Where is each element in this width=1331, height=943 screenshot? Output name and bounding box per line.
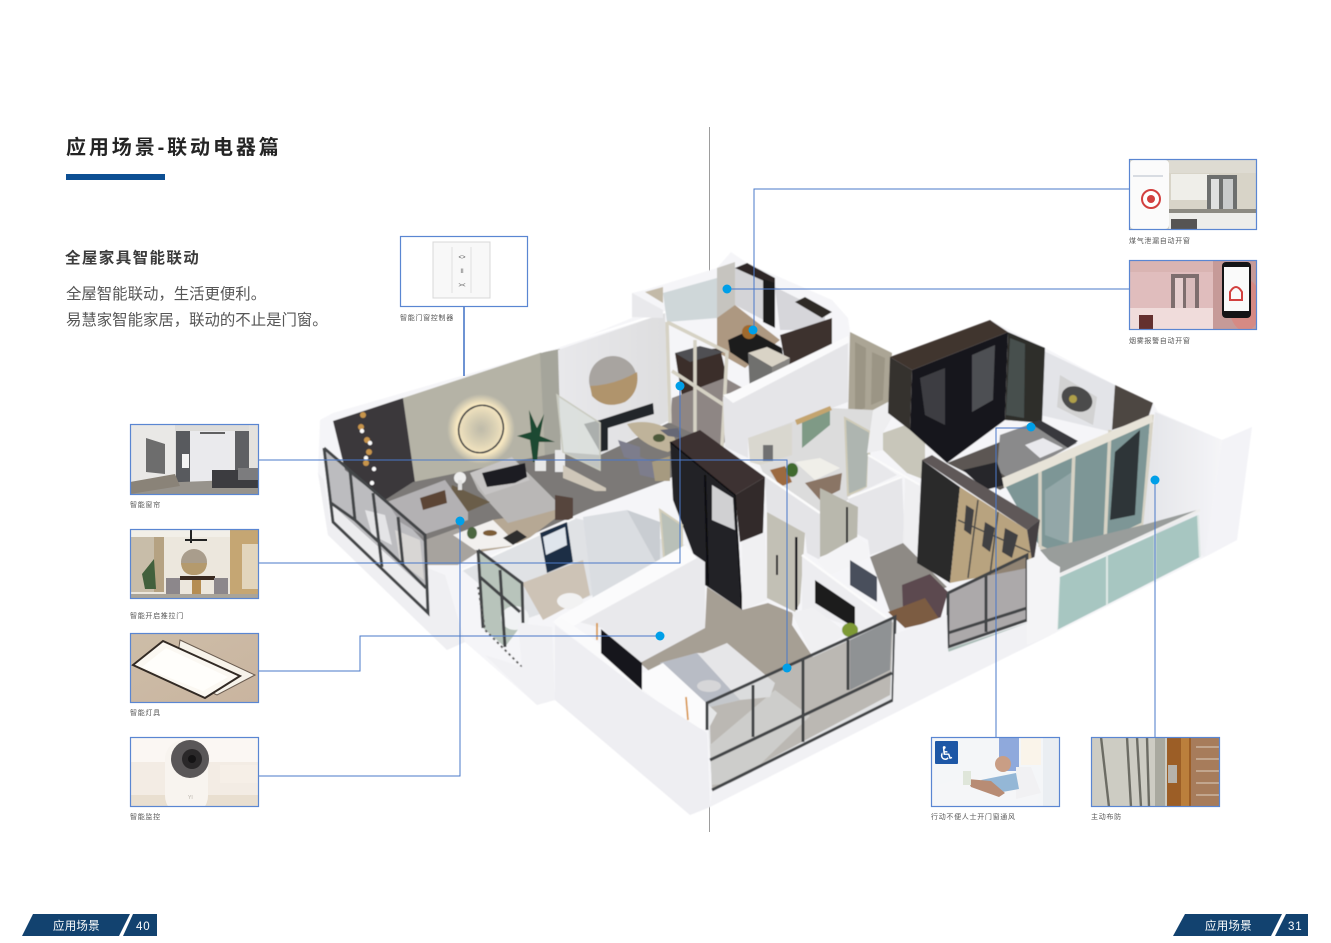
callout: smoke alarm auto open window — [1129, 260, 1261, 345]
wall block — [318, 473, 465, 650]
counter — [795, 458, 840, 480]
right exterior wall — [1143, 412, 1222, 557]
toilet — [557, 593, 583, 609]
zone: living room — [318, 312, 722, 650]
callout: smart lighting — [130, 633, 259, 717]
orange lamps — [597, 623, 688, 720]
white dining wall — [558, 313, 668, 455]
plant — [517, 410, 555, 471]
floor — [385, 422, 722, 548]
body text: 全屋智能联动，生活更便利。 — [66, 285, 266, 303]
stub wall with door — [867, 402, 895, 453]
glass door — [660, 510, 682, 570]
sofa left — [387, 480, 468, 535]
hotspot pins — [456, 284, 1160, 672]
sculpture — [555, 450, 565, 472]
black panel — [601, 629, 642, 690]
carpet — [425, 528, 478, 565]
callout: smart sliding door: 智能开启推拉门 — [130, 611, 184, 620]
callout: smart curtains: 智能窗帘 — [130, 500, 161, 509]
sliding grey door — [820, 488, 858, 557]
dark chevron panel — [333, 398, 415, 502]
centre fold line — [708, 127, 710, 832]
footer tab right: 应用场景 — [1205, 918, 1252, 932]
white coffee table — [453, 520, 527, 550]
icon: wall switch panel: II — [460, 269, 464, 275]
rug — [480, 505, 573, 552]
wall art panel — [850, 560, 877, 602]
stone wall — [717, 262, 735, 330]
tv console — [792, 607, 847, 657]
sliding door — [1002, 414, 1153, 560]
callout: smart monitoring camera: 智能监控 — [130, 812, 161, 821]
back wall — [462, 518, 685, 620]
callout: smart curtains — [130, 424, 259, 509]
callout: window ventilation for mobility impaired: 行动不便人士开门窗通风 — [931, 812, 1016, 821]
exterior front wall — [710, 615, 1057, 807]
low wall — [817, 537, 868, 575]
title underline bar — [66, 174, 165, 180]
zone: bathroom — [462, 510, 685, 705]
body text: 易慧家智能家居，联动的不止是门窗。 — [66, 311, 328, 329]
glass shower door — [845, 418, 870, 495]
callout: window ventilation for mobility impaired — [931, 737, 1060, 821]
green door — [802, 410, 830, 448]
wood shelf — [770, 466, 792, 487]
front wall top lip — [553, 618, 643, 692]
window bathroom — [478, 550, 529, 667]
callout: smart sliding door — [130, 529, 259, 620]
diagonal wall — [743, 460, 820, 560]
back wall — [1040, 350, 1115, 432]
zone: door panelled tan — [848, 332, 892, 420]
wall front — [555, 625, 710, 815]
study floor strip — [948, 622, 1030, 660]
shower glass — [583, 510, 660, 600]
isometric floor plan — [318, 252, 1252, 815]
green plant — [786, 463, 798, 477]
icon: wall switch panel: <> — [458, 255, 466, 261]
round mirror — [589, 356, 638, 405]
study floor — [870, 543, 947, 612]
callout: smart monitoring camera: YI — [188, 795, 193, 801]
floor — [947, 440, 1040, 490]
inner walls — [848, 455, 897, 498]
dark peninsula — [675, 348, 728, 398]
glass door frame — [667, 322, 727, 447]
window study — [948, 555, 1027, 647]
ring wall lamp — [447, 394, 515, 464]
marble back wall — [663, 278, 717, 322]
small white wall — [485, 623, 555, 705]
zone: centre bathroom — [743, 402, 932, 575]
zone: study — [870, 455, 1040, 660]
body text — [66, 285, 328, 329]
white door — [883, 418, 925, 480]
callout: smoke alarm auto open window: 烟雾报警自动开窗 — [1129, 336, 1191, 345]
black console — [584, 403, 654, 452]
art — [540, 522, 573, 573]
window: living — [324, 448, 428, 613]
vanity — [805, 473, 842, 500]
mirror wall — [748, 423, 792, 465]
footer tab right: 31 — [1288, 921, 1303, 933]
callout: gas leak auto open window: 煤气泄漏自动开窗 — [1129, 236, 1191, 245]
icon: wall switch panel: >< — [458, 283, 466, 289]
brown lower cabinets — [780, 318, 832, 378]
gold leaf lamp — [358, 412, 376, 485]
title: 应用场景-联动电器篇 — [66, 135, 282, 159]
callout: smart lighting: 智能灯具 — [130, 708, 161, 717]
plant — [842, 623, 858, 637]
zone: front bedroom — [553, 545, 895, 815]
footer tab left: 应用场景 — [53, 918, 100, 932]
footer tab left — [22, 914, 157, 936]
zone: kitchen — [632, 262, 850, 458]
icon: wheelchair sign: ♿ — [938, 743, 955, 765]
tall cabinets — [735, 268, 775, 325]
island — [748, 347, 790, 367]
left stub wall — [632, 293, 663, 318]
tv — [815, 580, 855, 628]
subheading: 全屋家具智能联动 — [65, 248, 200, 267]
stone side panel — [1112, 385, 1153, 430]
wall facing — [560, 548, 705, 664]
zone: master bedroom — [888, 320, 1222, 630]
side table and lamp — [450, 472, 490, 512]
dining table — [618, 422, 682, 481]
icon: wall switch panel — [433, 242, 490, 298]
narrow stone cabinet — [1005, 332, 1045, 423]
window glass — [707, 617, 895, 790]
rug — [710, 690, 810, 785]
bath base — [748, 408, 873, 513]
callout: smart door and window controller: 智能门窗控制器 — [400, 313, 454, 322]
kitchen front wall — [723, 338, 848, 458]
bed — [660, 643, 775, 707]
callout: active security: 主动布防 — [1091, 812, 1122, 821]
armchair — [555, 495, 573, 520]
wardrobe black — [888, 320, 1008, 463]
marble toilet wall — [522, 560, 590, 620]
bookcase — [917, 455, 1040, 583]
desk — [902, 574, 948, 620]
bed foot block — [643, 663, 717, 730]
tv wall — [802, 555, 887, 640]
footer tab left: 40 — [136, 921, 151, 933]
zone: centre wardrobe — [670, 430, 765, 610]
connector lines — [259, 189, 1155, 776]
balcony glass rail — [1057, 510, 1200, 630]
wood floor — [640, 587, 893, 790]
marble floor — [670, 378, 752, 447]
concrete feature wall — [403, 349, 561, 482]
wall beside concrete door — [742, 532, 767, 610]
balcony floor — [1040, 510, 1197, 573]
callout: smart door and window controller — [400, 236, 528, 322]
exterior shadow wall right — [1205, 427, 1252, 557]
eye artwork — [1057, 375, 1097, 425]
bed — [963, 420, 1078, 490]
glass divider — [557, 395, 600, 470]
sofa right — [470, 457, 555, 523]
black counter — [728, 330, 784, 372]
kitchen floor — [717, 305, 780, 368]
window frame — [707, 617, 895, 790]
callout: gas leak auto open window — [1129, 159, 1257, 245]
callout: active security — [1091, 737, 1220, 821]
concrete door — [767, 512, 805, 612]
footer tab right — [1173, 914, 1308, 936]
callout: smart monitoring camera — [130, 737, 259, 821]
plan silhouette — [318, 252, 1222, 815]
